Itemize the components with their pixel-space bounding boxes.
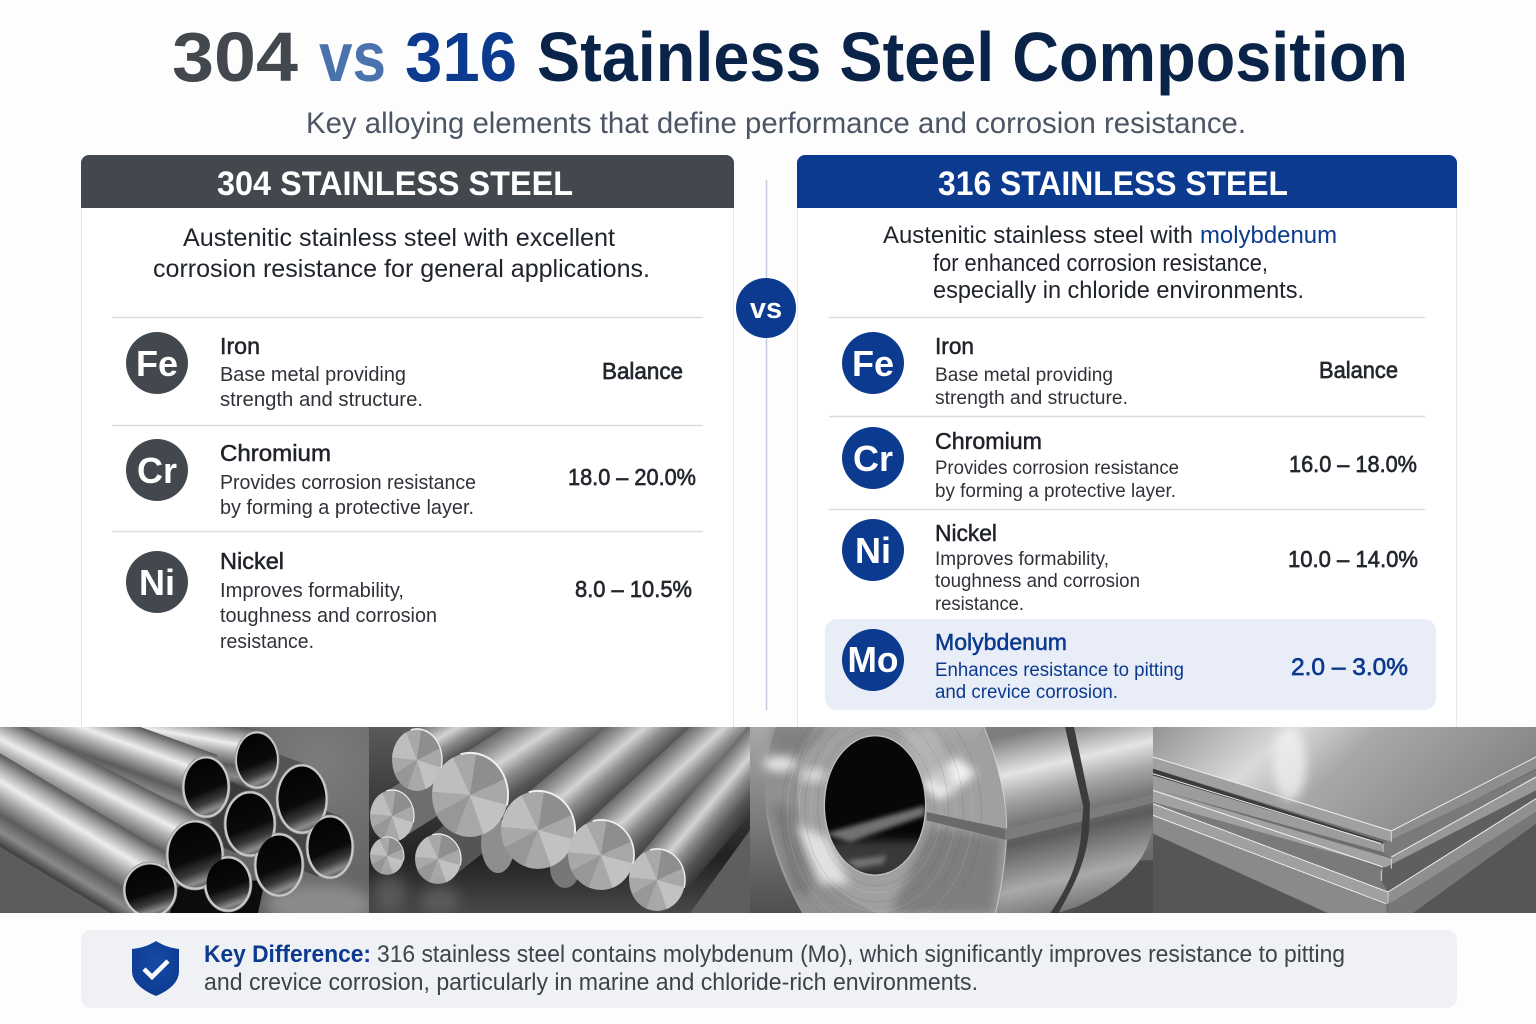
row: iron 316: Balance	[1319, 357, 1398, 383]
title: 304	[172, 18, 298, 96]
row: iron 304: Balance	[602, 358, 683, 384]
description: 304	[153, 224, 650, 283]
row: nickel 304: Nickel	[220, 548, 284, 574]
row: molybdenum highlight: 2.0 – 3.0%	[1291, 654, 1408, 681]
row: nickel 316: Nickel	[935, 520, 997, 546]
description: 316: especially in chloride environments.	[933, 277, 1304, 304]
panel: 304 stainless steel	[81, 155, 734, 756]
row: nickel 316: toughness and corrosion	[935, 571, 1140, 592]
description: 316: molybdenum	[1200, 222, 1337, 249]
row: iron 316: Base metal providing	[935, 365, 1113, 386]
title: 316	[405, 18, 517, 96]
callout text: and crevice corrosion, particularly in marine and chloride-rich environments.	[204, 969, 978, 996]
title: vs	[319, 18, 386, 96]
row: iron 316: Fe	[852, 343, 894, 384]
row: iron 304: strength and structure.	[220, 388, 423, 411]
title	[172, 18, 1408, 96]
row: chromium 304: Provides corrosion resistance	[220, 471, 476, 494]
row: molybdenum highlight: and crevice corrosion.	[935, 682, 1118, 703]
vs badge	[736, 180, 796, 710]
row: iron 316	[842, 332, 1398, 409]
photo strip	[0, 727, 1536, 913]
panel header: 304	[81, 155, 734, 208]
photo: stacked plates	[1153, 727, 1536, 915]
row: molybdenum highlight: Enhances resistance to pitting	[935, 660, 1184, 681]
row: chromium 304: Cr	[137, 450, 177, 491]
panel: 316 stainless steel	[797, 155, 1457, 756]
row: chromium 316: Cr	[853, 438, 893, 479]
row: iron 304	[126, 332, 683, 411]
panel header: 304: 304 STAINLESS STEEL	[217, 165, 573, 203]
row: molybdenum highlight	[825, 619, 1436, 710]
row: nickel 304: Ni	[139, 562, 175, 603]
photo: steel coil	[750, 727, 1153, 913]
row: chromium 316	[842, 427, 1417, 502]
description: 304: Austenitic stainless steel with excellent	[183, 224, 615, 252]
callout text: Key Difference:	[204, 941, 371, 968]
subtitle: Key alloying elements that define performance and corrosion resistance.	[306, 107, 1246, 140]
row: nickel 304: resistance.	[220, 630, 314, 653]
callout text	[204, 941, 1345, 996]
row: molybdenum highlight: Molybdenum	[935, 629, 1067, 655]
panel header: 316	[797, 155, 1457, 208]
callout text: 316 stainless steel contains molybdenum (Mo), which significantly improves resistance to pitting	[377, 941, 1345, 968]
row: iron 304: Fe	[136, 343, 178, 384]
photo: stacked tubes	[0, 727, 369, 913]
panel header: 316: 316 STAINLESS STEEL	[938, 165, 1288, 203]
vs badge: vs	[750, 293, 782, 325]
row: nickel 316: Improves formability,	[935, 549, 1109, 570]
row: nickel 316	[842, 519, 1418, 615]
row: nickel 304: Improves formability,	[220, 579, 404, 602]
row: iron 316: strength and structure.	[935, 388, 1128, 409]
row: chromium 316: 16.0 – 18.0%	[1289, 451, 1417, 477]
row: chromium 316: Chromium	[935, 428, 1042, 454]
photo: round bars	[369, 727, 750, 913]
title: Stainless Steel Composition	[537, 18, 1408, 96]
icon: shield check	[132, 941, 179, 996]
row: iron 304: Iron	[220, 333, 260, 359]
row: nickel 316: resistance.	[935, 594, 1024, 615]
row: chromium 304: by forming a protective layer.	[220, 496, 474, 519]
row: chromium 304: Chromium	[220, 440, 331, 466]
row: chromium 316: Provides corrosion resistance	[935, 458, 1179, 479]
row: nickel 316: Ni	[855, 530, 891, 571]
row: iron 316: Iron	[935, 333, 974, 359]
row: nickel 304	[126, 548, 692, 653]
row: nickel 304: 8.0 – 10.5%	[575, 576, 692, 602]
key difference callout	[81, 930, 1457, 1008]
description: 316: Austenitic stainless steel with	[883, 222, 1193, 249]
description: 304: corrosion resistance for general applications.	[153, 255, 650, 283]
row: chromium 304	[126, 439, 696, 519]
row: chromium 304: 18.0 – 20.0%	[568, 464, 696, 490]
row: iron 304: Base metal providing	[220, 363, 406, 386]
row: chromium 316: by forming a protective layer.	[935, 481, 1176, 502]
description: 316: for enhanced corrosion resistance,	[933, 250, 1268, 277]
row: nickel 304: toughness and corrosion	[220, 604, 437, 627]
description: 316	[883, 222, 1337, 304]
row: molybdenum highlight: Mo	[848, 639, 898, 680]
row: nickel 316: 10.0 – 14.0%	[1288, 546, 1418, 572]
